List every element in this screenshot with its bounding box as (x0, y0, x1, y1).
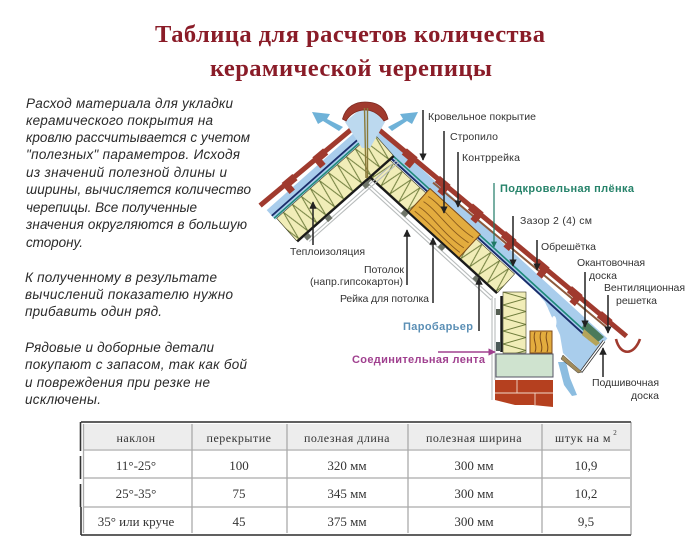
label: ceiling: (напр.гипсокартон) (310, 276, 403, 288)
text block: extra row: вычислений показателю нужно (25, 287, 233, 302)
label: soffit board: доска (631, 390, 659, 402)
vapour barrier and ceiling (340, 149, 498, 294)
text block: material calculation: из значений полезной длины и (26, 165, 227, 180)
right roof under-layers (334, 120, 607, 375)
text block: extra row: прибавить один ряд. (25, 304, 162, 319)
title (155, 21, 545, 82)
text block: spare parts: исключены. (25, 392, 101, 407)
table row 25-35: 345 мм (327, 486, 367, 501)
table row 35+: 300 мм (454, 514, 494, 529)
vent arrow bottom (558, 362, 577, 396)
table header row: штук на м (555, 431, 611, 445)
left roof under-layers (267, 123, 399, 249)
label: counter batten: Контррейка (462, 152, 520, 164)
text block: material calculation: значения округляются в большую (25, 217, 247, 232)
label: counter batten (458, 152, 520, 207)
table row 11-25: 320 мм (327, 458, 367, 473)
right roof tiles (367, 122, 629, 344)
label: ceiling: Потолок (364, 264, 404, 276)
text block: spare parts: Рядовые и доборные детали (25, 340, 214, 355)
label: edge board (577, 257, 645, 327)
table row 25-35 (116, 486, 597, 501)
label: lathing: Обрешётка (541, 241, 596, 253)
ridge cap (342, 102, 388, 178)
table (80, 422, 631, 535)
left roof tiles (258, 123, 362, 213)
table header row (116, 429, 617, 445)
brick wall (495, 380, 553, 407)
text block: material calculation: кровлю рассчитывается с учетом (26, 130, 250, 145)
table row 35+: 9,5 (578, 514, 594, 529)
text block: spare parts (25, 340, 247, 407)
label: air gap: Зазор 2 (4) см (520, 215, 592, 227)
label: insulation: Теплоизоляция (290, 246, 365, 258)
label: soffit board: Подшивочная (592, 377, 659, 389)
label: ceiling batten (340, 238, 433, 305)
text block: material calculation: "полезных" параметров. Исходя (26, 147, 240, 162)
text block: material calculation: сторону. (26, 235, 83, 250)
label: vent grille (604, 282, 685, 333)
text block: extra row: К полученному в результате (25, 270, 217, 285)
mauerlat wood block (530, 331, 552, 353)
label: edge board: доска (589, 270, 617, 282)
table header row: 2 (613, 429, 617, 437)
table row 25-35: 300 мм (454, 486, 494, 501)
label: vent grille: Вентиляционная (604, 282, 685, 294)
label: underlay film: Подкровельная плёнка (500, 183, 635, 195)
gutter (616, 339, 640, 352)
table row 35+: 45 (232, 514, 246, 529)
label: vent grille: решетка (616, 295, 657, 307)
roof diagram (258, 102, 640, 407)
text block: material calculation: черепицы. Все полученные (26, 200, 197, 215)
title: керамической черепицы (210, 55, 492, 82)
rafter (408, 189, 480, 258)
table row 25-35: 10,2 (575, 486, 597, 501)
table grid (80, 422, 631, 535)
label: vapour barrier: Паробарьер (403, 321, 473, 333)
label: rafter: Стропило (450, 131, 498, 143)
white fringe of ventilation air (535, 294, 556, 328)
table header row: наклон (116, 431, 156, 445)
text block: spare parts: покупают с запасом, так как бой (25, 357, 247, 372)
concrete band (496, 354, 553, 377)
label: connecting tape: Соединительная лента (352, 354, 486, 366)
eave blue air space (522, 270, 604, 372)
table header row: полезная длина (304, 431, 390, 445)
table row 35+: 35° или круче (98, 514, 175, 529)
table row 25-35: 75 (232, 486, 246, 501)
table row 11-25: 11°-25° (116, 458, 156, 473)
vent arrow left (312, 112, 343, 131)
table row 25-35: 25°-35° (116, 486, 156, 501)
label: vapour barrier (403, 278, 479, 333)
label: soffit board (592, 348, 659, 402)
wall vapour barrier and ceiling (492, 296, 502, 400)
text block: material calculation (25, 96, 251, 250)
table header row: перекрытие (207, 431, 271, 445)
wall insulation (503, 292, 526, 353)
fascia and soffit (561, 320, 604, 373)
label: lathing (537, 240, 596, 270)
vent arrow right (388, 112, 418, 131)
table row 11-25: 300 мм (454, 458, 494, 473)
label: roof covering (423, 110, 536, 160)
table header background (83, 424, 630, 449)
label: roof covering: Кровельное покрытие (428, 111, 536, 123)
text block: material calculation: керамического покрытия на (26, 113, 213, 128)
table row 35+ (98, 514, 594, 529)
label: ceiling (310, 230, 407, 288)
diagram callouts (290, 110, 685, 402)
label: edge board: Окантовочная (577, 257, 645, 269)
table row 11-25: 10,9 (575, 458, 597, 473)
table row 35+: 375 мм (327, 514, 367, 529)
label: rafter (444, 131, 498, 213)
text block: extra row (25, 270, 233, 319)
table row 11-25 (116, 458, 597, 473)
text block: material calculation: Расход материала для укладки (26, 96, 233, 111)
label: ceiling batten: Рейка для потолка (340, 293, 429, 305)
table row 11-25: 100 (229, 458, 249, 473)
text block: spare parts: и повреждения при резке не (25, 375, 210, 390)
label: insulation (290, 202, 365, 258)
table header row: полезная ширина (426, 431, 522, 445)
text block: material calculation: ширины, вычисляется количество (26, 182, 251, 197)
label: air gap (513, 215, 592, 266)
title: Таблица для расчетов количества (155, 21, 545, 48)
